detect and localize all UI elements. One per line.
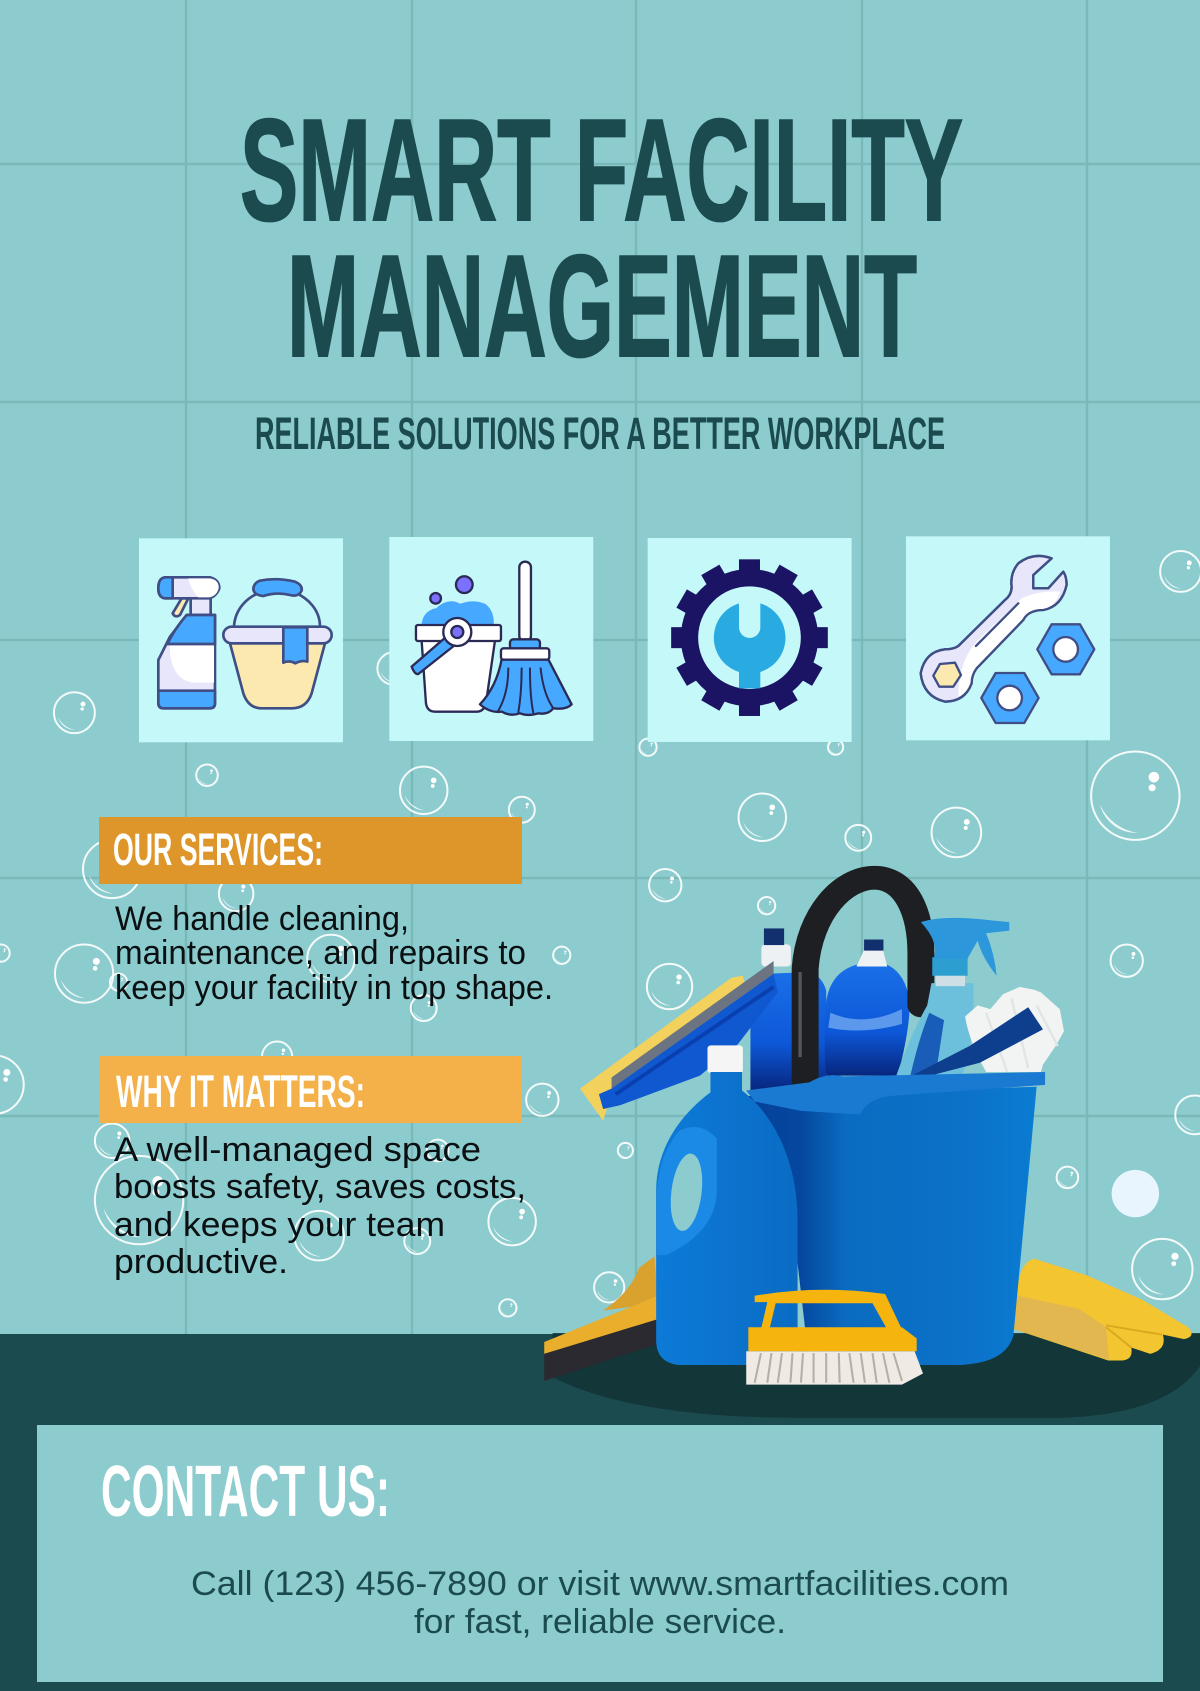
why it matters text: and keeps your team xyxy=(114,1206,445,1244)
gear teeth xyxy=(671,559,828,716)
squeegee head xyxy=(580,961,778,1121)
spray bottle xyxy=(896,918,1009,1078)
nut two xyxy=(981,673,1039,723)
services text: We handle cleaning, xyxy=(115,900,409,938)
services heading bar: OUR SERVICES: xyxy=(113,824,323,875)
icon tile: spray bottle and bucket xyxy=(139,538,343,742)
foam xyxy=(423,602,493,625)
services text: maintenance, and repairs to xyxy=(115,934,526,972)
back bottle two xyxy=(825,965,910,1076)
bucket handle xyxy=(234,593,320,627)
bucket arm xyxy=(412,635,455,674)
why it matters heading bar: WHY IT MATTERS: xyxy=(116,1066,365,1117)
icon tile: wrench and nuts xyxy=(906,536,1110,740)
mop stick xyxy=(519,562,531,642)
why it matters text: boosts safety, saves costs, xyxy=(114,1168,526,1206)
spray neck xyxy=(191,597,211,615)
floor shadow xyxy=(553,1333,1200,1418)
contact details: for fast, reliable service. xyxy=(414,1603,786,1641)
wrench body xyxy=(921,556,1067,702)
bucket rim xyxy=(746,1072,1045,1115)
why it matters text: productive. xyxy=(114,1243,288,1281)
nut one xyxy=(1037,624,1094,674)
wrench xyxy=(714,603,785,688)
why it matters text: A well-managed space xyxy=(114,1131,481,1169)
why it matters text xyxy=(114,1131,526,1281)
services heading bar xyxy=(99,817,522,884)
services text xyxy=(115,900,553,1007)
bucket xyxy=(422,641,495,712)
footer band xyxy=(0,1334,1200,1691)
icon tile: bucket and mop xyxy=(389,537,593,741)
bubbles xyxy=(456,576,473,593)
yellow cloth and squeegee xyxy=(603,1256,658,1311)
spray trigger xyxy=(173,598,188,616)
contact details: Call (123) 456-7890 or visit www.smartfacilities.com xyxy=(191,1565,1009,1603)
contact heading: CONTACT US: xyxy=(101,1452,390,1532)
services text: keep your facility in top shape. xyxy=(115,969,553,1007)
small nut xyxy=(933,663,961,687)
soap bubbles xyxy=(0,551,1200,1316)
contact details xyxy=(191,1565,1009,1641)
icon tile: gear with wrench xyxy=(648,538,852,742)
large blue bottle xyxy=(656,1045,798,1365)
title xyxy=(240,89,963,387)
cloth xyxy=(283,627,307,663)
scrub brush with bristles xyxy=(910,987,1064,1079)
mop head xyxy=(480,659,572,715)
bucket body xyxy=(230,643,325,708)
back bottle one xyxy=(750,972,826,1090)
black bucket handle xyxy=(800,878,921,1085)
yellow hand brush xyxy=(746,1290,923,1385)
bucket body xyxy=(748,1087,1037,1365)
bottle body xyxy=(158,615,215,708)
rubber gloves xyxy=(1013,1259,1192,1361)
contact panel xyxy=(37,1425,1163,1682)
cleaning supplies illustration xyxy=(544,878,1200,1418)
spray head xyxy=(158,577,219,598)
